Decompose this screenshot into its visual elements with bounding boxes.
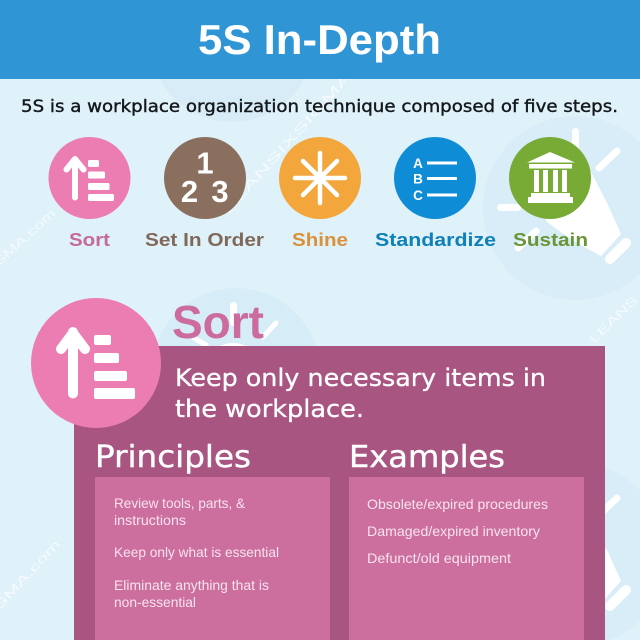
description: Keep only necessary items in [175, 364, 546, 392]
title: 5S In-Depth [198, 16, 441, 63]
panel: Sort details [74, 346, 605, 640]
description: the workplace. [175, 395, 364, 423]
icon: A B C list: A [413, 156, 423, 171]
icon: numbers 1 2 3: 3 [211, 174, 229, 209]
box [349, 477, 584, 640]
column: Principles [95, 440, 330, 640]
icon: sparkle [279, 137, 361, 219]
label: Set In Order [145, 230, 264, 250]
step: Shine [279, 137, 361, 250]
icon: sort arrow and bars [48, 137, 130, 219]
label: Sort [69, 230, 110, 250]
list: Keep only what is essential [114, 545, 279, 560]
intro sentence: 5S is a workplace organization technique composed of five steps. [21, 97, 618, 117]
list: Obsolete/expired procedures [367, 497, 548, 512]
step: Standardize [375, 137, 496, 250]
icon: numbers 1 2 3 [164, 137, 246, 219]
icon: large Sort badge [31, 298, 161, 428]
box [95, 477, 330, 640]
icon: numbers 1 2 3: 2 [181, 174, 198, 209]
list: non-essential [114, 595, 196, 610]
icon: A B C list: C [413, 188, 423, 203]
step: Sustain [509, 137, 591, 250]
background decoration: pale circles and light bulbs: LEANS [586, 293, 640, 346]
icon: A B C list: B [413, 172, 423, 186]
list: Defunct/old equipment [367, 551, 511, 566]
background decoration: pale circles and light bulbs: LEANSIXSIGMA [220, 70, 354, 217]
icon: numbers 1 2 3: 1 [196, 146, 214, 180]
icon: A B C list [394, 137, 476, 219]
heading: Principles [95, 440, 251, 475]
step: Set In Order [145, 137, 264, 250]
section heading: Sort: Sort [172, 296, 264, 348]
header band [0, 0, 640, 79]
list: Review tools, parts, & [114, 496, 245, 511]
list [367, 497, 548, 566]
label: Sustain [513, 230, 588, 250]
label: Standardize [375, 230, 496, 250]
list: Damaged/expired inventory [367, 524, 540, 539]
column: Examples [349, 440, 584, 640]
icon: pillared building [509, 137, 591, 219]
step: Sort [48, 137, 130, 250]
heading: Examples [349, 440, 505, 475]
list [114, 496, 279, 610]
list: instructions [114, 513, 186, 528]
list: Eliminate anything that is [114, 578, 269, 593]
description [175, 364, 546, 423]
label: Shine [292, 230, 348, 250]
